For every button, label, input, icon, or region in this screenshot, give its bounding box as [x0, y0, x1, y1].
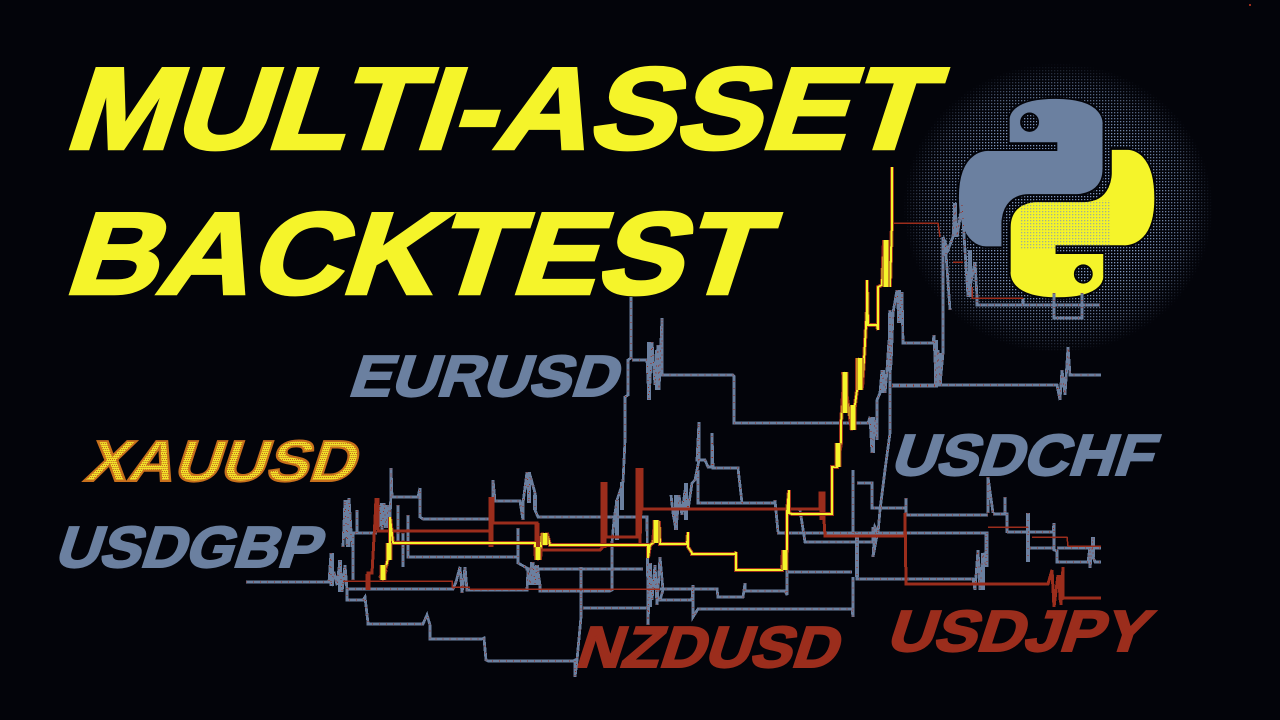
title: multi-asset: MULTI-ASSET — [54, 44, 957, 174]
blob: gold spikes — [383, 240, 886, 580]
title: backtest: BACKTEST — [54, 189, 790, 319]
line: thick red equity curve — [368, 468, 1101, 607]
label: NZDUSD: NZDUSD — [570, 614, 852, 680]
blob: red spikes — [368, 468, 1061, 600]
label: USDGBP: USDGBP — [49, 514, 334, 580]
line: red speckle on slate curves — [246, 203, 1101, 677]
python logo yellow snake — [1010, 149, 1155, 298]
dot: top right speck — [1249, 4, 1251, 6]
line: thin red equity curves — [343, 223, 1101, 589]
python logo blue snake — [958, 98, 1103, 247]
icon: python logo — [958, 98, 1155, 298]
line: slate equity curves — [246, 203, 1101, 677]
label: EURUSD: EURUSD — [343, 343, 632, 409]
blob: gold spikes red outline — [383, 240, 886, 580]
line: gold curve red outline — [380, 167, 892, 580]
line: slate main run along y305 — [977, 305, 1100, 318]
icon: dotted halo behind python logo — [903, 63, 1213, 353]
label: USDCHF: USDCHF — [885, 422, 1167, 488]
label: USDJPY: USDJPY — [881, 598, 1161, 664]
blob: slate spikes — [332, 203, 1093, 607]
dither overlay on yellow snake — [1020, 200, 1110, 250]
label: XAUUSD: XAUUSD — [79, 428, 370, 494]
line: gold curve — [380, 167, 892, 580]
chart: multi-asset equity curves — [246, 167, 1101, 677]
